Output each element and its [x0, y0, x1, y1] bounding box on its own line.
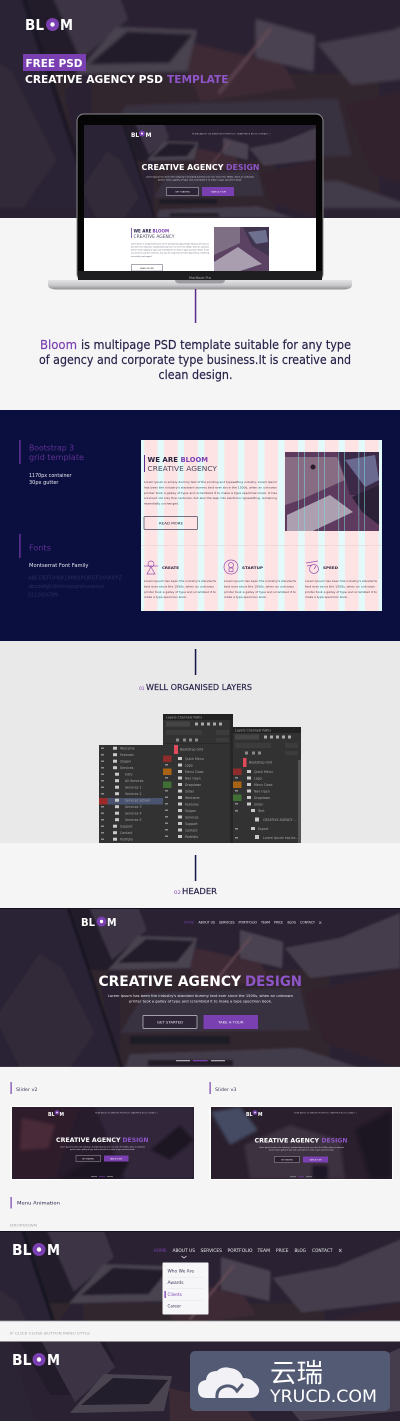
watermark text: latin: YRUCD.COM	[269, 1387, 377, 1407]
nav: header: PRICE	[274, 920, 283, 924]
layers panel 3: Layers Channels Paths	[235, 728, 271, 732]
feature: speed: Lorem Ipsum has been the industry's standards	[305, 579, 378, 583]
fonts heading: Fonts	[29, 544, 51, 552]
layers panel 2: Slider	[185, 790, 195, 794]
grid overlay page	[141, 440, 382, 611]
laptop base	[48, 280, 352, 290]
thumb title	[56, 1137, 148, 1144]
heading: header: 02	[174, 890, 181, 896]
layers panel 2	[163, 714, 233, 843]
nav: dropdown strip: CONTACT	[312, 1248, 333, 1253]
layers panel 2: Logo	[185, 764, 193, 768]
layers panel 3: Quick Menu	[254, 770, 273, 774]
layers panel 1: Intro	[125, 772, 132, 776]
laptop screen: buttons	[166, 187, 234, 196]
layers panel 2: Contact	[185, 828, 198, 832]
laptop screen: title	[142, 163, 260, 172]
laptop screen: content paragraph	[131, 242, 209, 258]
layers panel 2: Features	[185, 802, 199, 806]
logo: header: M	[107, 916, 116, 929]
layers panel 2: Slogan	[185, 809, 196, 813]
page heading	[144, 455, 218, 473]
laptop screen: buttons: GET STARTED	[175, 190, 191, 194]
layers panel 1: Welcome	[120, 746, 135, 750]
hero banner	[0, 0, 400, 218]
layers panel 2: Dropdown	[185, 783, 201, 787]
layers panel 2: Welcome	[185, 796, 200, 800]
laptop screen: content paragraph: has been the industry's standard dummy text ever since the 1500s, when an unknown	[131, 246, 209, 248]
feature: speed: printer took a galley of type and scrambled it to	[305, 590, 377, 594]
thumb subtitle: Lorem Ipsum has been the industry's standard dummy text ever since the 1500s, when an unknown	[259, 1146, 344, 1149]
nav: header: ×	[318, 920, 322, 926]
feature: create: make a type specimen book.	[144, 595, 187, 599]
page heading: CREATIVE AGENCY	[148, 465, 218, 473]
label: menu animation	[10, 1197, 60, 1208]
laptop screen: logo	[131, 130, 152, 139]
laptop screen: content paragraph: printer took a galley of type and scrambled it to make a type specimen book. It has	[131, 248, 209, 252]
panel: grid template	[0, 410, 400, 641]
hero subtitle: printer took a galley of type and scrambled it to make a type specimen book.	[129, 998, 272, 1004]
nav: dropdown strip: HOME	[154, 1248, 167, 1253]
label: slider v2	[10, 1082, 38, 1094]
layers panel 3: Lorem Ipsum has be...	[263, 836, 298, 840]
button: get started	[143, 1016, 197, 1028]
hero title: DESIGN	[245, 974, 302, 990]
badge: free psd: FREE PSD	[26, 57, 82, 70]
icon: create	[144, 561, 158, 574]
layers panel 2: Support	[185, 822, 198, 826]
layers panel 1: Services 2	[125, 792, 141, 796]
layers panel 3: Text	[257, 809, 265, 813]
nav: dropdown strip: ×	[338, 1248, 342, 1254]
thumb subtitle	[259, 1146, 344, 1152]
layers panel 1: Services	[120, 766, 134, 770]
logo: Bloom top: M	[60, 16, 73, 34]
heading: creative agency psd template	[25, 73, 228, 86]
laptop screen: logo: M	[146, 131, 152, 139]
label: menu animation: Menu Animation	[17, 1200, 60, 1206]
laptop screen: subtitle	[146, 176, 255, 182]
hero subtitle	[108, 993, 294, 1004]
laptop screen: subtitle: printer took a galley of type and scrambled it to make a type specimen book.	[158, 178, 242, 182]
laptop screen: content heading: BLOOM	[152, 229, 169, 234]
logo: dropdown strip: BL	[12, 1241, 32, 1259]
logo: dropdown strip	[12, 1241, 60, 1259]
nav: header: ABOUT US	[198, 920, 215, 924]
nav: dropdown strip: PORTFOLIO	[228, 1248, 252, 1253]
panel: dropdown menu strip	[0, 1231, 400, 1322]
feature: startup	[224, 560, 297, 599]
layers panel 1: Services 3	[125, 805, 141, 809]
thumb subtitle: printer took a galley of type and scrambled it to make a type specimen book.	[269, 1148, 335, 1152]
bootstrap heading	[19, 440, 84, 464]
fonts heading	[19, 534, 51, 558]
panel: header hero	[0, 908, 400, 1067]
layers panel 2: Menu Close	[185, 770, 203, 774]
thumb dots	[91, 1175, 113, 1178]
thumb title: DESIGN	[322, 1138, 348, 1144]
intro paragraph: of agency and corporate type business.It is creative and	[39, 352, 351, 367]
container specs: 1170px container	[29, 473, 72, 479]
feature: create: CREATE	[162, 566, 180, 570]
thumb subtitle: Lorem Ipsum has been the industry's standard dummy text ever since the 1500s, when an unknown	[60, 1146, 145, 1148]
layers panel 3: CREATIVE AGENCY ...	[263, 818, 297, 822]
layers panel 1: Portfolio	[120, 838, 133, 842]
watermark: yrucd	[190, 1351, 390, 1411]
layers panel 1: Support	[120, 824, 133, 828]
layers panel 2: Nav Open	[185, 776, 201, 780]
thumb logo: BL	[246, 1112, 253, 1118]
layers panel 3: Logo	[254, 776, 262, 780]
laptop screen: photo	[214, 227, 269, 271]
dropdown menu: Who We Are	[168, 1268, 195, 1274]
layers panel 3: Nav Open	[254, 790, 270, 794]
laptop screen: read more button	[132, 264, 162, 271]
icon: cloud	[198, 1367, 259, 1398]
laptop screen: subtitle: Lorem Ipsum has been the industry's standard dummy text ever since the 1500s, when an unknown	[146, 176, 255, 178]
intro paragraph: clean design.	[158, 367, 232, 382]
nav: header: TEAM	[260, 920, 270, 924]
layers panel 1: All Services	[125, 779, 144, 783]
icon: startup	[224, 560, 238, 574]
thumb title: DESIGN	[122, 1137, 148, 1144]
nav: header: BLOG	[288, 920, 296, 924]
intro paragraph: Bloom	[40, 337, 77, 352]
layers panel 3: Dropdown	[254, 796, 270, 800]
thumbnail: slider v3	[210, 1106, 393, 1180]
layers panel 3: Menu Close	[254, 783, 272, 787]
layers panel 1: Services 4	[125, 812, 141, 816]
label: slider v2: Slider v2	[16, 1087, 38, 1093]
thumbnail: slider v2	[10, 1106, 194, 1180]
laptop screen: title: CREATIVE AGENCY	[142, 163, 224, 172]
laptop screen: content heading: WE ARE	[134, 229, 152, 234]
heading: creative agency psd template: CREATIVE AGENCY PSD	[25, 73, 163, 86]
laptop screen: hero	[84, 125, 316, 218]
logo: closed strip: BL	[12, 1351, 32, 1369]
intro paragraph	[39, 337, 351, 382]
feature: create: text ever since the 1500s, when an unknown	[144, 584, 214, 588]
font specimen: 0123456789	[28, 592, 58, 598]
laptop mockup	[48, 114, 352, 290]
thumb buttons	[76, 1156, 128, 1162]
nav: header: CONTACT	[300, 920, 316, 924]
laptop bottom bar: MacBook Pro	[189, 276, 211, 280]
page heading: BLOOM	[180, 456, 208, 464]
laptop screen: content heading: CREATIVE AGENCY	[134, 234, 175, 239]
nav: dropdown strip	[154, 1248, 342, 1254]
layers panel 2: Layers Channels Paths	[166, 716, 202, 720]
nav: dropdown strip: BLOG	[294, 1248, 306, 1253]
thumb logo: M	[60, 1112, 64, 1118]
layers panel 2: Services	[185, 816, 199, 820]
laptop screen: nav: HOME ABOUT US SERVICES PORTFOLIO TEAM PRICE BLOG CONTACT ×	[192, 132, 272, 136]
bootstrap heading: grid template	[29, 453, 84, 462]
laptop screen: title: DESIGN	[226, 163, 260, 172]
layers panel 1: Slogan	[120, 760, 131, 764]
laptop screen: content paragraph: essentially unchanged.	[131, 255, 152, 258]
font specimen: abcdefghijklmnopqrstuvwxyz	[28, 584, 104, 590]
read more button: READ MORE	[159, 522, 183, 526]
logo: closed strip	[12, 1351, 60, 1369]
logo: header: BL	[81, 916, 95, 929]
thumb title	[254, 1138, 348, 1144]
layers panel 2: Portfolio	[185, 835, 198, 839]
nav: header: SERVICES	[219, 920, 234, 924]
label: click close button: IF CLICK CLOSE BUTTON MENU STYLE	[10, 1330, 91, 1336]
thumb logo: M	[258, 1112, 263, 1118]
feature: startup: Lorem Ipsum has been the industry's standards	[224, 579, 297, 583]
heading: creative agency psd template: TEMPLATE	[167, 73, 228, 86]
laptop screen: content paragraph: Lorem Ipsum is simply dummy text of the printing and typesetting industry. Lorem Ipsum	[131, 242, 209, 246]
feature: create: printer took a galley of type and scrambled it to	[144, 590, 216, 594]
thumb buttons: GET STARTED	[281, 1158, 294, 1161]
layers panel 1: Services School	[125, 798, 150, 802]
logo: closed strip: M	[47, 1351, 60, 1369]
page paragraph: printer took a galley of type and scrambled it to make a type specimen book. It has	[144, 491, 278, 495]
layers panel 1: Services 5	[125, 818, 141, 822]
thumb logo	[246, 1110, 263, 1118]
feature: speed: make a type specimen book.	[305, 595, 348, 599]
dropdown menu: Awards	[168, 1280, 184, 1285]
nav: dropdown strip: TEAM	[256, 1248, 271, 1253]
layers panel 1: Contact	[120, 831, 133, 835]
thumb dots	[290, 1176, 312, 1178]
page photo	[285, 452, 379, 531]
laptop screen: buttons: TAKE A TOUR	[211, 190, 227, 194]
thumb subtitle	[60, 1146, 145, 1151]
panel: closed menu strip	[0, 1341, 400, 1421]
icon: chevron	[182, 1256, 186, 1258]
thumb buttons: TAKE A TOUR	[310, 1158, 322, 1161]
heading: well organised layers: WELL ORGANISED LAYERS	[146, 683, 252, 692]
layers panel 1: Services 1	[125, 786, 141, 790]
laptop screen: white content	[84, 218, 316, 271]
thumb title: CREATIVE AGENCY	[254, 1138, 320, 1144]
feature: speed	[305, 561, 378, 599]
thumb subtitle: printer took a galley of type and scrambled it to make a type specimen book.	[70, 1148, 136, 1151]
connector line	[195, 289, 196, 323]
font specimen: ABCDEFGHIJKLMNOPQRSTUVWXYZ	[28, 576, 123, 582]
layers panel 2: Bootstrap Grid	[180, 748, 203, 752]
laptop screen: content paragraph: survived not only five centuries, but also the leap into electronic typesetting, remaining	[131, 252, 209, 254]
page paragraph: has been the industry's standard dummy text ever since the 1500s, when an unknown	[144, 486, 277, 490]
feature: startup: text ever since the 1500s, when an unknown	[224, 584, 294, 588]
laptop bottom bar	[78, 271, 322, 280]
intro paragraph: is multipage PSD template suitable for any type	[81, 337, 351, 352]
watermark text: chinese: 云瑞	[270, 1358, 323, 1388]
page paragraph: Lorem Ipsum is simply dummy text of the printing and typesetting industry. Lorem Ipsum	[144, 480, 277, 484]
feature: create	[144, 561, 217, 599]
label: dropdown: DROPDOWN	[10, 1222, 37, 1228]
label: slider v3: Slider v3	[215, 1087, 237, 1093]
layers panel 3	[233, 727, 301, 843]
layers panel 3: Bootstrap Grid	[249, 760, 272, 764]
layers panel 1: Features	[120, 753, 134, 757]
nav: header	[184, 920, 322, 926]
container specs	[29, 473, 72, 486]
logo: header	[81, 916, 116, 929]
page paragraph	[144, 480, 278, 506]
slider dots	[176, 1060, 225, 1061]
font specimen	[28, 576, 123, 598]
layers panel 2: Quick Menu	[185, 757, 204, 761]
nav: dropdown strip: SERVICES	[200, 1248, 223, 1253]
nav: header: PORTFOLIO	[238, 920, 257, 924]
logo: Bloom top	[25, 16, 73, 34]
divider line 01	[195, 649, 196, 675]
container specs: 30px gutter	[29, 480, 59, 486]
button: get started: GET STARTED	[157, 1020, 183, 1024]
button: take a tour	[204, 1015, 258, 1029]
thumb buttons	[274, 1156, 328, 1162]
dropdown menu	[162, 1262, 208, 1314]
read more button	[144, 516, 198, 530]
page paragraph: essentially unchanged.	[144, 502, 179, 506]
thumb logo	[48, 1110, 64, 1118]
laptop lid	[77, 114, 323, 281]
feature: startup: printer took a galley of type and scrambled it to	[224, 590, 296, 594]
panel: layers section background	[0, 641, 400, 843]
thumb buttons: GET STARTED	[82, 1157, 95, 1160]
logo: dropdown strip: M	[47, 1241, 60, 1259]
thumb nav: HOME ABOUT US SERVICES PORTFOLIO TEAM PRICE BLOG CONTACT ×	[294, 1112, 358, 1114]
thumb logo: BL	[48, 1112, 55, 1118]
font family name: Montserrat Font Family	[29, 563, 89, 569]
logo: Bloom top: BL	[25, 16, 44, 34]
label: slider v3	[210, 1082, 237, 1094]
layers panel 3: Slider	[254, 802, 264, 806]
feature: create: Lorem Ipsum has been the industry's standards	[144, 579, 217, 583]
laptop screen: logo: BL	[131, 131, 139, 139]
feature: speed: text ever since the 1500s, when an unknown	[305, 584, 375, 588]
thumb title: CREATIVE AGENCY	[56, 1137, 121, 1144]
grid gutters	[141, 440, 382, 611]
feature: startup: STARTUP	[242, 566, 263, 570]
feature: speed: SPEED	[323, 566, 338, 570]
icon: speed	[306, 561, 318, 574]
divider line 02	[195, 855, 196, 881]
nav: dropdown strip: PRICE	[276, 1248, 289, 1253]
thumb nav: HOME ABOUT US SERVICES PORTFOLIO TEAM PRICE BLOG CONTACT ×	[95, 1112, 159, 1114]
heading: well organised layers: 01	[139, 686, 145, 691]
dropdown menu: Clients	[168, 1292, 182, 1297]
layers panel 1	[99, 745, 164, 843]
hero subtitle: Lorem Ipsum has been the industry's standard dummy text ever since the 1500s, when an unknown	[108, 993, 294, 998]
page heading: WE ARE	[148, 456, 178, 464]
laptop screen: read more button: READ MORE	[140, 267, 155, 270]
laptop screen: content heading	[131, 228, 175, 239]
thumb buttons: TAKE A TOUR	[110, 1157, 122, 1160]
layers panel 3: Export	[258, 827, 269, 831]
feature: startup: make a type specimen book.	[224, 595, 267, 599]
nav: dropdown strip: ABOUT US	[172, 1248, 195, 1253]
button: take a tour: TAKE A TOUR	[217, 1020, 244, 1024]
nav: header: HOME	[184, 920, 194, 924]
dropdown menu: Career	[168, 1304, 181, 1308]
page paragraph: survived not only five centuries, but also the leap into electronic typesetting, remaining	[144, 496, 277, 500]
bootstrap heading: Bootstrap 3	[29, 444, 74, 452]
hero title: CREATIVE AGENCY	[98, 974, 242, 990]
heading: header: HEADER	[182, 887, 217, 896]
